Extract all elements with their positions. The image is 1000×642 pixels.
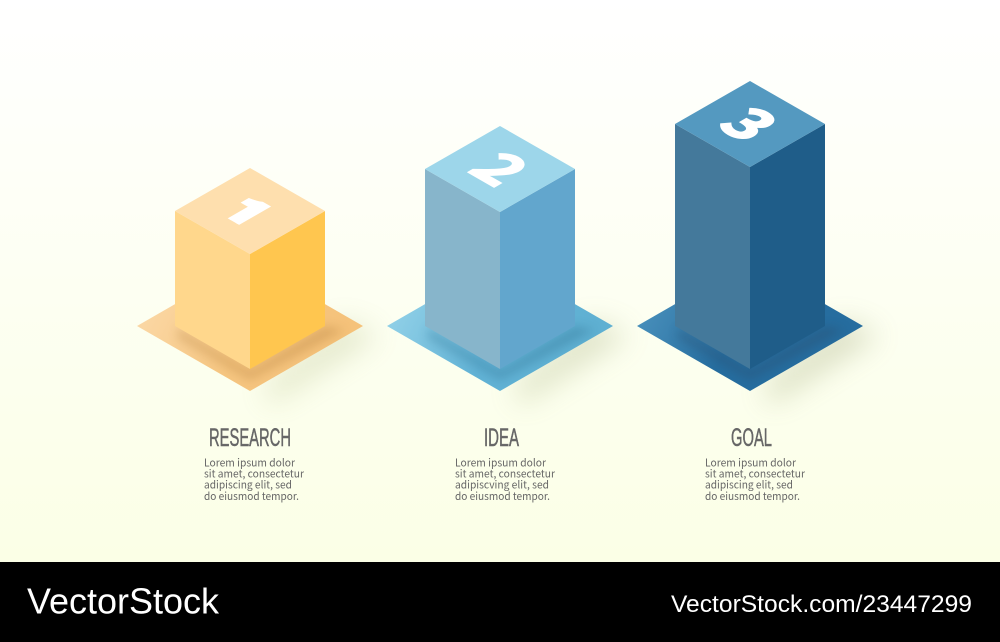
description 3: Lorem ipsum dolor — [705, 456, 797, 470]
base plate 2 — [387, 304, 613, 391]
column 2: idea — [387, 126, 630, 504]
heading: idea: IDEA — [484, 424, 519, 452]
number 2: 2 — [452, 137, 556, 197]
column 3: goal — [637, 81, 880, 504]
description 1: Lorem ipsum dolor — [204, 456, 296, 470]
footer logo: VectorStock — [27, 580, 220, 622]
shadow on ground 1 — [265, 320, 380, 405]
number 1: 1 — [192, 181, 302, 244]
description 1: adipiscing elit, sed — [204, 478, 292, 492]
base plate 3 — [637, 304, 863, 391]
block 1 — [175, 168, 325, 369]
description 1: do eiusmod tempor. — [204, 489, 299, 504]
description 3 — [705, 456, 806, 504]
block 2 — [425, 126, 575, 369]
number 3: 3 — [701, 92, 805, 152]
description 1: sit amet, consectetur — [204, 466, 305, 482]
footer bar — [0, 562, 1000, 642]
column 1: research — [137, 168, 380, 504]
description 2: do eiusmod tempor. — [455, 489, 550, 504]
footer url: VectorStock.com/23447299 — [671, 591, 972, 618]
shadow on ground 3 — [765, 320, 880, 405]
description 1 — [204, 456, 305, 504]
description 2: adipiscving elit, sed — [455, 478, 549, 492]
description 3: adipiscing elit, sed — [705, 478, 793, 492]
shadow on ground 2 — [515, 320, 630, 405]
description 3: sit amet, consectetur — [705, 466, 806, 482]
heading: research: RESEARCH — [209, 424, 291, 452]
description 2: Lorem ipsum dolor — [455, 456, 547, 470]
description 2 — [455, 456, 556, 504]
base plate 1 — [137, 304, 363, 391]
description 2: sit amet, consectetur — [455, 466, 556, 482]
block 3 — [675, 81, 825, 369]
description 3: do eiusmod tempor. — [705, 489, 800, 504]
heading: goal: GOAL — [731, 424, 772, 452]
